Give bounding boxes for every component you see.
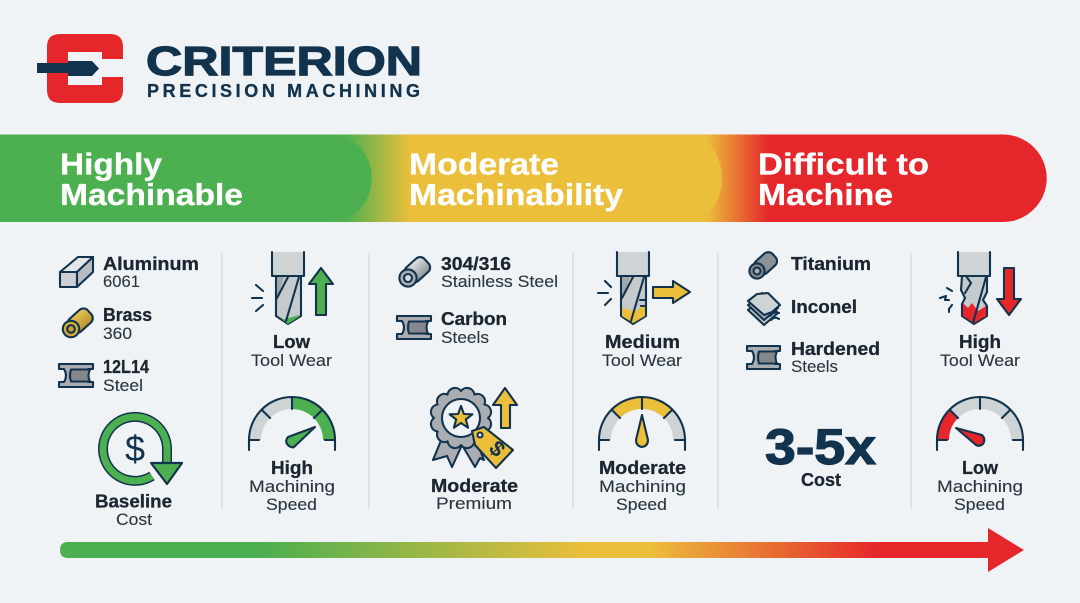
icon: chipped drill bit <box>940 252 990 324</box>
icon: speed gauge low <box>937 397 1023 450</box>
material: inconel: Inconel <box>791 297 857 317</box>
price tag <box>472 427 513 468</box>
heading: highly machinable <box>60 146 243 212</box>
machining speed: moderate <box>599 397 686 514</box>
machining speed: low: Machining <box>937 477 1023 496</box>
machining speed: moderate: Speed <box>616 495 667 514</box>
tool wear: low: Tool Wear <box>251 351 332 370</box>
material: brass 360: Brass <box>103 305 152 325</box>
arrow: machinability gradient <box>60 528 1024 572</box>
icon: aluminum block <box>60 257 93 287</box>
material: hardened steels <box>747 339 880 376</box>
material: 304/316 stainless steel: 304/316 <box>441 254 511 274</box>
material: hardened steels: Hardened <box>791 339 880 359</box>
material: carbon steels: Steels <box>441 328 489 347</box>
icon: dollar circular arrow: $ <box>125 428 145 469</box>
up arrow <box>493 388 517 428</box>
icon: hardened steel beam <box>747 346 780 369</box>
heading: difficult to machine: Difficult to <box>758 146 929 182</box>
icon: speed gauge high <box>249 397 335 450</box>
material: carbon steels: Carbon <box>441 309 507 329</box>
cost: moderate premium: Premium <box>436 494 512 513</box>
machining speed: low: Speed <box>954 495 1005 514</box>
icon: award rosette with price tag: $ <box>484 436 510 462</box>
banner: machinability scale <box>0 134 1047 222</box>
material: 304/316 stainless steel: Stainless Steel <box>441 272 558 291</box>
logo mark <box>37 34 123 103</box>
cost: moderate premium <box>431 388 518 513</box>
icon: stainless tube <box>396 255 433 290</box>
tool wear: medium <box>598 252 690 370</box>
heading: highly machinable: Highly <box>60 146 163 182</box>
machining speed: high: High <box>271 458 313 478</box>
tool wear: medium: Tool Wear <box>602 351 682 370</box>
material: 12L14 steel <box>59 357 149 395</box>
cost: baseline: Baseline <box>95 492 172 512</box>
icon: green up arrow <box>309 268 333 315</box>
icon: steel beam <box>59 364 93 387</box>
material: 304/316 stainless steel <box>396 254 558 291</box>
icon: red down arrow <box>997 268 1021 315</box>
cost: baseline: Cost <box>116 510 152 529</box>
material: brass 360: 360 <box>103 324 132 343</box>
logo tagline: PRECISION MACHINING <box>147 81 420 101</box>
material: titanium: Titanium <box>791 254 871 274</box>
logo wordmark: CRITERION <box>146 38 422 84</box>
cost: baseline <box>95 417 182 529</box>
heading: moderate machinability <box>409 146 624 212</box>
material: inconel <box>748 293 857 325</box>
icon: speed gauge moderate <box>599 397 685 450</box>
material: brass 360 <box>59 305 152 343</box>
material: hardened steels: Steels <box>791 357 838 376</box>
tool wear: high: High <box>959 332 1001 352</box>
icon: carbon steel beam <box>397 316 431 339</box>
heading: moderate machinability: Machinability <box>409 177 624 212</box>
material: 12L14 steel: Steel <box>103 376 143 395</box>
heading: moderate machinability: Moderate <box>409 146 559 182</box>
gear rosette <box>431 388 491 448</box>
heading: highly machinable: Machinable <box>60 177 243 212</box>
machining speed: low <box>937 397 1023 514</box>
logo <box>37 34 422 103</box>
material: aluminum 6061: Aluminum <box>103 254 199 274</box>
machining speed: high <box>249 397 335 514</box>
material: carbon steels <box>397 309 507 347</box>
machining speed: moderate: Moderate <box>599 458 686 478</box>
material: 12L14 steel: 12L14 <box>103 357 149 377</box>
ribbons <box>433 438 462 467</box>
icon: brass rod <box>59 306 95 341</box>
heading: difficult to machine <box>758 146 929 212</box>
banner yellow segment <box>300 134 722 222</box>
tool wear: low <box>251 252 333 370</box>
cost: moderate premium: Moderate <box>431 476 518 496</box>
icon: inconel stacked plates <box>748 293 780 325</box>
machining speed: low: Low <box>962 458 999 478</box>
machining speed: moderate: Machining <box>599 477 686 496</box>
tool wear: low: Low <box>273 332 311 352</box>
icon: drill bit with medium wear <box>598 252 649 324</box>
icon: titanium rod <box>746 250 779 282</box>
cost: 3-5x: 3-5x <box>765 419 876 475</box>
icon: yellow right arrow <box>653 281 690 303</box>
machining speed: high: Speed <box>266 495 317 514</box>
banner green segment <box>0 134 372 222</box>
icon: drill bit with low wear <box>252 252 304 324</box>
heading: difficult to machine: Machine <box>758 177 893 212</box>
star <box>450 406 472 428</box>
tool wear: high <box>940 252 1021 370</box>
material: aluminum 6061: 6061 <box>103 272 140 291</box>
cost: 3-5x: Cost <box>801 470 841 490</box>
tool wear: medium: Medium <box>605 332 680 352</box>
machining speed: high: Machining <box>249 477 335 496</box>
material: aluminum 6061 <box>60 254 199 291</box>
tool wear: high: Tool Wear <box>940 351 1020 370</box>
material: titanium <box>746 250 871 282</box>
